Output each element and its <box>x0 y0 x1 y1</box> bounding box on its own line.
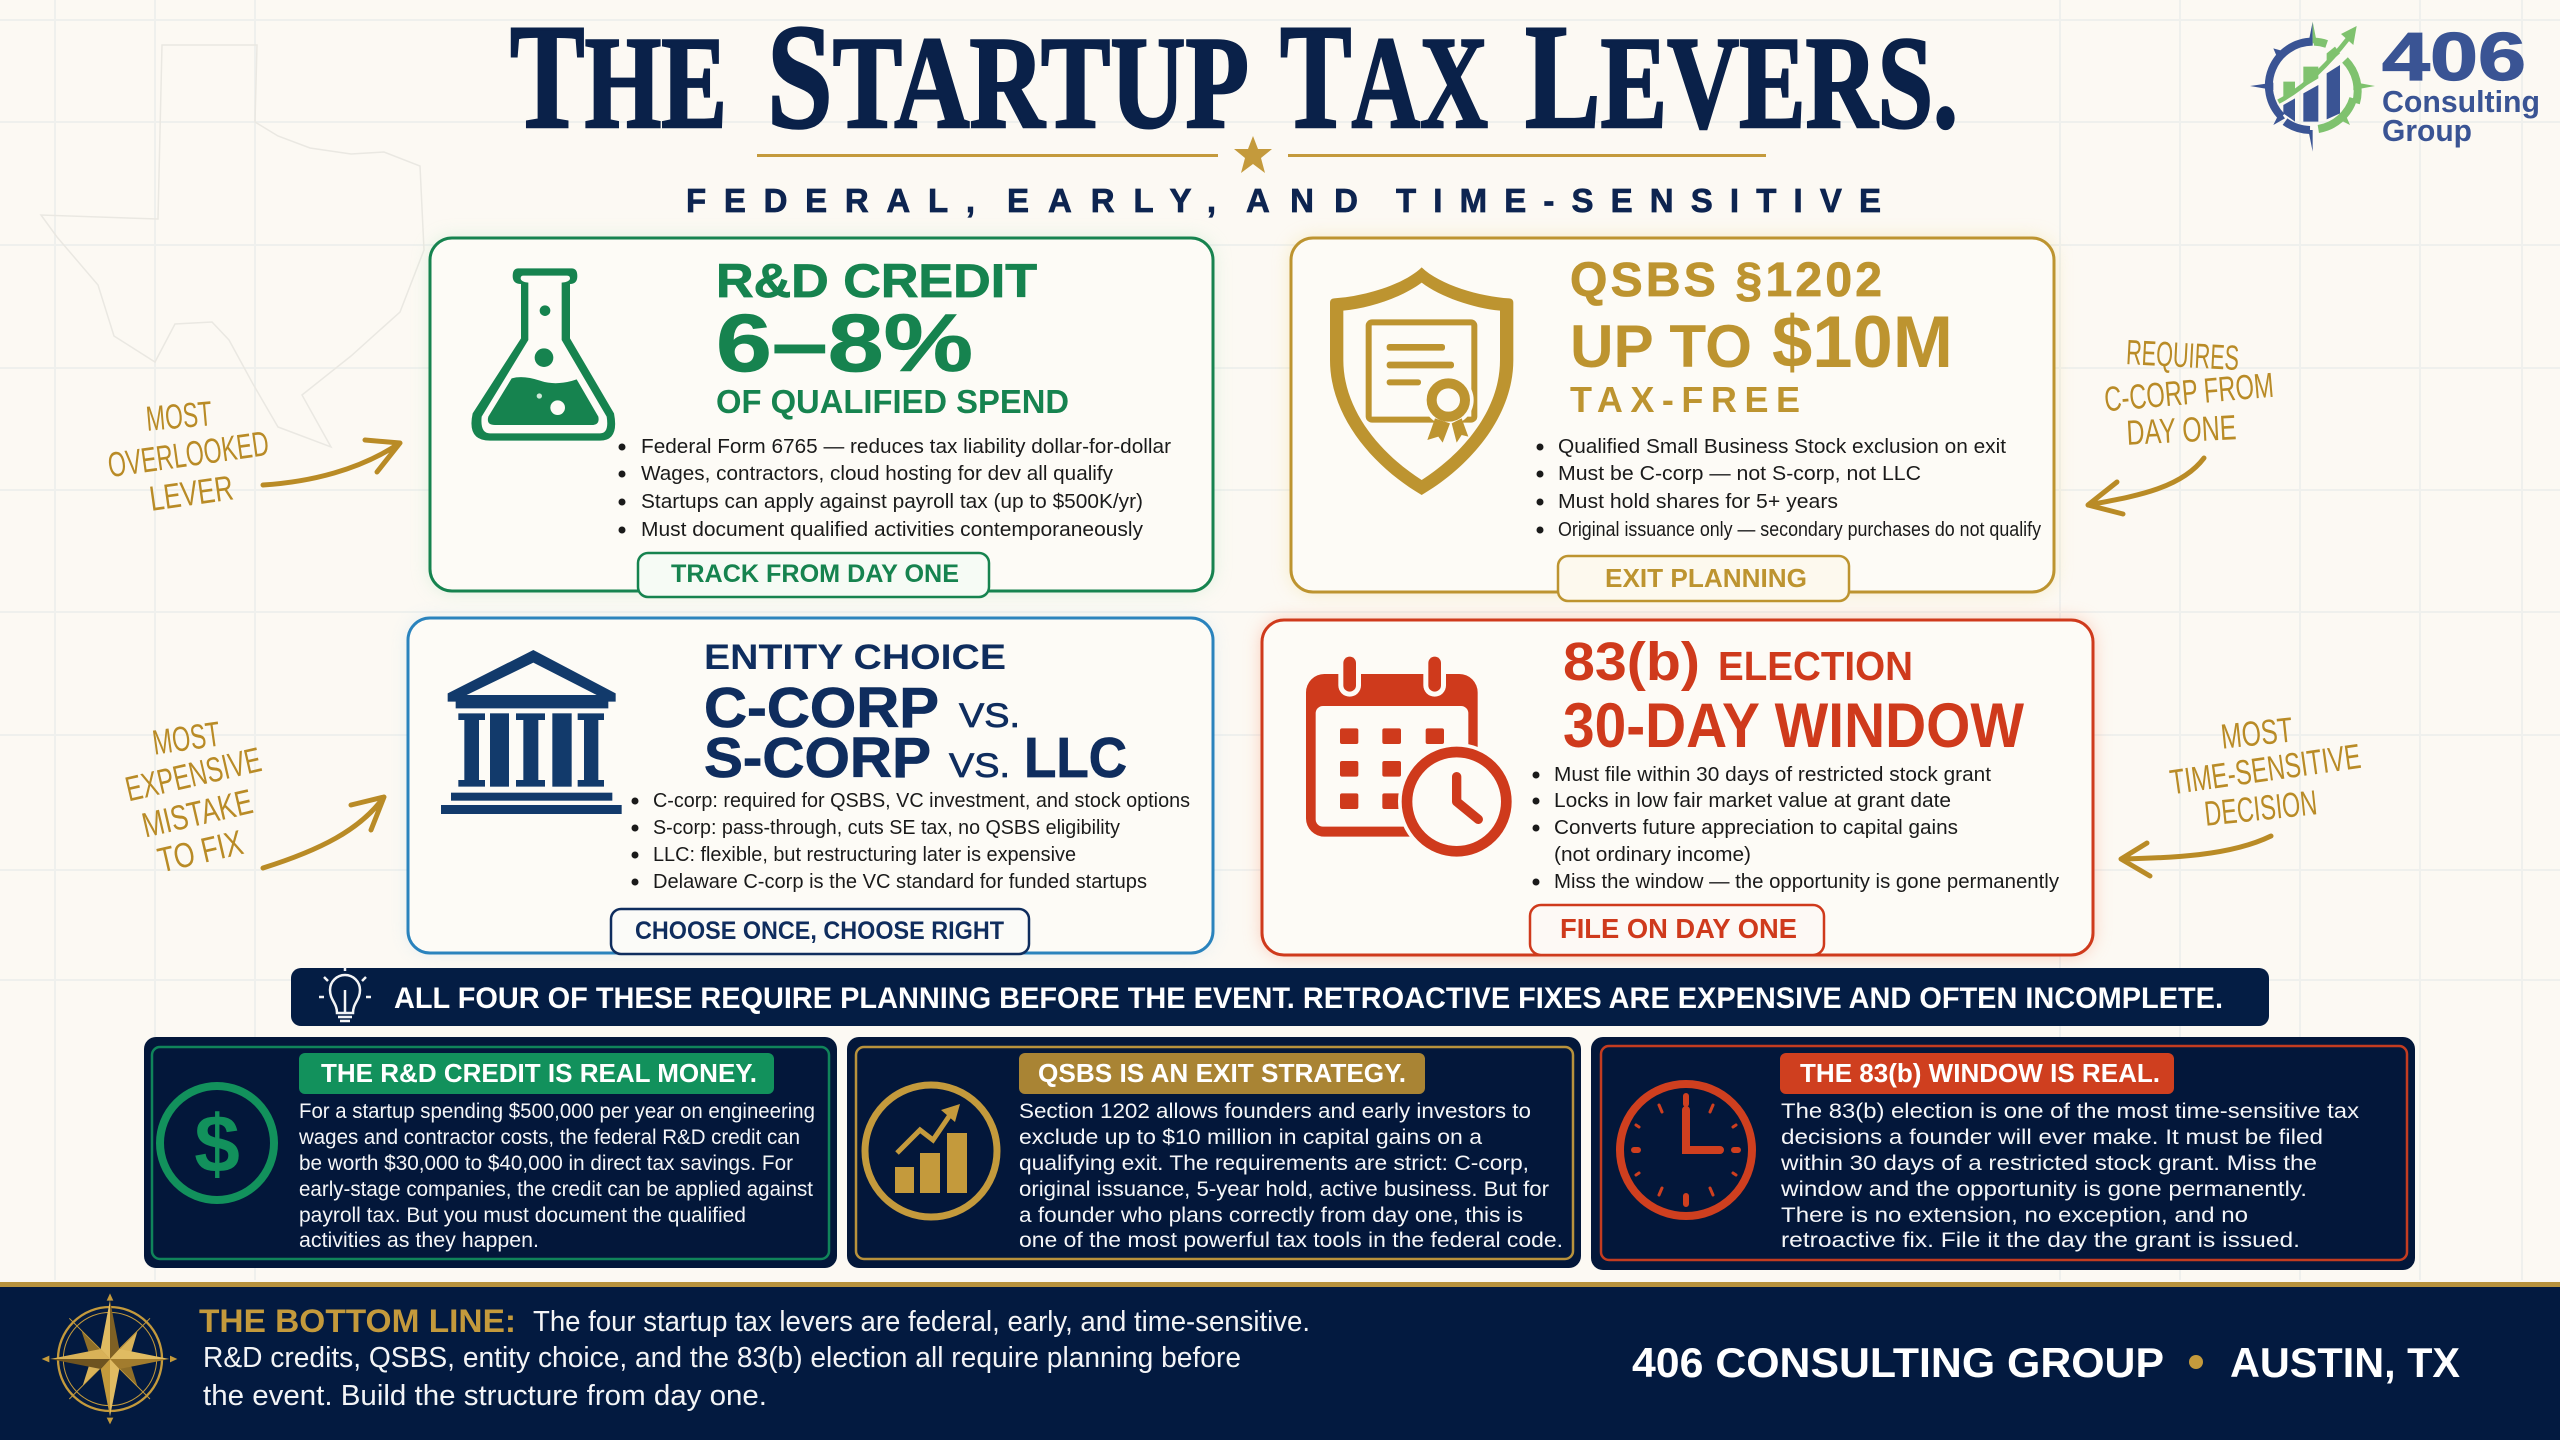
stat: up to $10M: UP TO <box>1570 313 1752 380</box>
bullet list: Must be C-corp — not S-corp, not LLC <box>1558 463 1921 485</box>
icon: compass rose <box>42 1293 177 1424</box>
heading: R&D credit: R&D CREDIT <box>716 254 1037 307</box>
body text: payroll tax. But you must document the qualified <box>299 1204 746 1227</box>
body text: early-stage companies, the credit can be applied against <box>299 1178 813 1201</box>
background: faint Texas outline <box>41 45 424 447</box>
tag: QSBS is an exit strategy: QSBS IS AN EXIT STRATEGY. <box>1038 1058 1406 1088</box>
annotation: most overlooked lever <box>105 394 400 519</box>
comparison: C-corp vs S-corp vs LLC <box>704 676 1127 790</box>
bullet list <box>1532 764 2059 893</box>
title <box>510 0 1958 160</box>
body text: For a startup spending $500,000 per year on engineering <box>299 1100 815 1123</box>
annotation: most expensive mistake to fix: EXPENSIVE <box>122 740 265 809</box>
heading: 83(b) election: 83(b) <box>1563 632 1700 692</box>
footer brand and location <box>1632 1339 2460 1386</box>
panel: 83(b) election <box>1262 620 2093 955</box>
tag: track from day one: TRACK FROM DAY ONE <box>671 560 959 588</box>
footer brand and location: AUSTIN, TX <box>2230 1339 2460 1386</box>
body text: original issuance, 5-year hold, active business. But for <box>1019 1178 1549 1201</box>
icon: growth chart <box>865 1085 997 1217</box>
subtitle: FEDERAL, <box>686 182 975 219</box>
annotation: most expensive mistake to fix: MISTAKE <box>138 782 256 845</box>
bullet list: Must document qualified activities contemporaneously <box>641 519 1143 541</box>
bullet list: Startups can apply against payroll tax (up to $500K/yr) <box>641 491 1143 513</box>
body text <box>1019 1100 1563 1252</box>
bottom line text: R&D credits, QSBS, entity choice, and the 83(b) election all require planning before <box>203 1342 1241 1374</box>
annotation: most time-sensitive decision <box>2121 710 2363 876</box>
body text: exclude up to $10 million in capital gains on a <box>1019 1126 1482 1149</box>
body text: wages and contractor costs, the federal R&D credit can <box>298 1126 800 1149</box>
bullet list: Wages, contractors, cloud hosting for dev all qualify <box>641 463 1113 485</box>
annotation: requires C-corp from day one: DAY ONE <box>2125 408 2237 453</box>
bullet list: (not ordinary income) <box>1554 844 1751 866</box>
annotation: requires C-corp from day one: C-CORP FROM <box>2103 366 2275 419</box>
comparison: C-corp vs S-corp vs LLC: C-CORP <box>704 676 939 740</box>
bullet list: Must file within 30 days of restricted stock grant <box>1554 764 1991 786</box>
footer band <box>0 1282 2560 1440</box>
title divider with star <box>757 136 1766 173</box>
body text <box>298 1100 815 1252</box>
body text: decisions a founder will ever make. It must be filed <box>1781 1126 2323 1149</box>
body text: a founder who plans correctly from day one, this is <box>1019 1204 1523 1227</box>
bottom line text: The four startup tax levers are federal, early, and time-sensitive. <box>533 1306 1310 1338</box>
bullet list: Delaware C-corp is the VC standard for funded startups <box>653 871 1147 893</box>
tag: choose once, choose right <box>611 909 1029 954</box>
bullet list: Original issuance only — secondary purchases do not qualify <box>1558 519 2041 541</box>
comparison: C-corp vs S-corp vs LLC: VS. <box>949 747 1010 785</box>
body text: qualifying exit. The requirements are strict: C-corp, <box>1019 1152 1529 1175</box>
annotation: most time-sensitive decision: TIME-SENSITIVE <box>2168 737 2363 802</box>
annotation: most expensive mistake to fix: MOST <box>150 715 223 763</box>
heading: 83(b) election <box>1563 632 1913 692</box>
tag: 83(b) window is real <box>1780 1053 2174 1094</box>
icon: classical building <box>441 650 622 814</box>
bullet list: Qualified Small Business Stock exclusion on exit <box>1558 436 2006 458</box>
bottom line text <box>199 1303 1310 1412</box>
heading: QSBS §1202: QSBS §1202 <box>1570 254 1882 307</box>
annotation: requires C-corp from day one: REQUIRES <box>2125 333 2240 378</box>
stat: 6–8%: 6–8% <box>716 298 973 389</box>
footer brand and location: 406 CONSULTING GROUP <box>1632 1339 2164 1386</box>
icon: shield with certificate <box>1330 267 1513 495</box>
annotation: requires C-corp from day one <box>2088 333 2275 514</box>
tag: file on day one <box>1530 905 1824 955</box>
body text: activities as they happen. <box>299 1229 539 1252</box>
body text: be worth $30,000 to $40,000 in direct tax savings. For <box>299 1152 793 1175</box>
icon: clock <box>1620 1084 1752 1216</box>
icon: flask <box>471 268 615 441</box>
annotation: most expensive mistake to fix <box>122 715 384 880</box>
tag: QSBS is an exit strategy <box>1019 1053 1425 1094</box>
logo: 406 Consulting Group: Group <box>2382 113 2472 148</box>
bottom line text: the event. Build the structure from day one. <box>203 1380 767 1412</box>
bullet list: Converts future appreciation to capital gains <box>1554 817 1958 839</box>
annotation: most overlooked lever: OVERLOOKED <box>105 424 271 485</box>
body text: within 30 days of a restricted stock grant. Miss the <box>1780 1152 2317 1175</box>
bullet list <box>1536 436 2041 541</box>
comparison: C-corp vs S-corp vs LLC: S-CORP <box>704 726 931 790</box>
heading: entity choice: ENTITY CHOICE <box>704 638 1006 677</box>
subheading: tax-free: TAX-FREE <box>1570 379 1800 420</box>
body text: There is no extension, no exception, and no <box>1781 1204 2248 1227</box>
comparison: C-corp vs S-corp vs LLC: VS. <box>959 697 1020 735</box>
banner: planning callout <box>291 967 2269 1026</box>
annotation: most time-sensitive decision: DECISION <box>2203 783 2319 834</box>
tag: exit planning: EXIT PLANNING <box>1605 563 1807 593</box>
tag: 83(b) window is real: THE 83(b) WINDOW IS REAL. <box>1800 1058 2160 1088</box>
body text <box>1780 1100 2360 1252</box>
tag: exit planning <box>1558 556 1849 601</box>
banner: planning callout: ALL FOUR OF THESE REQUIRE PLANNING BEFORE THE EVENT. RETROACTIVE FIXES ARE EXPENSIVE AND OFTEN INCOMPLETE. <box>394 982 2223 1015</box>
subtitle <box>686 182 1881 219</box>
logo mark: compass and growth chart <box>2250 22 2375 152</box>
icon: dollar coin <box>160 1086 274 1200</box>
icon: dollar coin: $ <box>194 1099 240 1190</box>
icon: calendar with clock <box>1306 652 1515 860</box>
annotation: most overlooked lever: LEVER <box>147 468 236 519</box>
body text: The 83(b) election is one of the most time-sensitive tax <box>1781 1100 2360 1123</box>
bullet list: LLC: flexible, but restructuring later is expensive <box>653 844 1076 866</box>
annotation: most time-sensitive decision: MOST <box>2219 710 2295 757</box>
annotation: most expensive mistake to fix: TO FIX <box>154 823 247 880</box>
panel: entity choice <box>408 618 1213 954</box>
bullet list: Must hold shares for 5+ years <box>1558 491 1838 513</box>
bullet list: S-corp: pass-through, cuts SE tax, no QSBS eligibility <box>653 817 1120 839</box>
body text: Section 1202 allows founders and early investors to <box>1019 1100 1531 1123</box>
stat: 30-day window: 30-DAY WINDOW <box>1563 691 2024 761</box>
tag: choose once, choose right: CHOOSE ONCE, CHOOSE RIGHT <box>635 917 1004 945</box>
subtitle: EARLY, <box>1007 182 1216 219</box>
body text: window and the opportunity is gone permanently. <box>1780 1178 2307 1201</box>
stat: up to $10M <box>1570 302 1953 383</box>
panel: QSBS 1202 <box>1291 238 2054 601</box>
panel: R&D credit detail <box>144 1037 837 1268</box>
bullet list: Federal Form 6765 — reduces tax liability dollar-for-dollar <box>641 436 1171 458</box>
bullet list: Miss the window — the opportunity is gone permanently <box>1554 871 2059 893</box>
panel: 83(b) detail <box>1591 1037 2415 1270</box>
heading: 83(b) election: ELECTION <box>1718 643 1913 689</box>
tag: R&D credit is real money: THE R&D CREDIT IS REAL MONEY. <box>321 1058 757 1088</box>
icon: lightbulb <box>319 967 371 1021</box>
bullet list: C-corp: required for QSBS, VC investment, and stock options <box>653 790 1190 812</box>
subtitle: TIME-SENSITIVE <box>1396 182 1881 219</box>
annotation: most overlooked lever: MOST <box>144 394 214 439</box>
tag: file on day one: FILE ON DAY ONE <box>1560 913 1797 944</box>
subheading: OF QUALIFIED SPEND <box>716 383 1069 420</box>
bullet list: Locks in low fair market value at grant date <box>1554 790 1951 812</box>
body text: one of the most powerful tax tools in the federal code. <box>1019 1229 1563 1252</box>
bullet list <box>618 436 1171 541</box>
logo: 406 Consulting Group: 406 <box>2382 19 2526 95</box>
bottom line text: THE BOTTOM LINE: <box>199 1303 516 1339</box>
logo: 406 Consulting Group <box>2250 19 2540 152</box>
comparison: C-corp vs S-corp vs LLC: LLC <box>1024 726 1127 790</box>
panel: R&D credit <box>430 238 1213 597</box>
body text: retroactive fix. File it the day the grant is issued. <box>1781 1229 2300 1252</box>
tag: track from day one <box>638 553 989 597</box>
logo: 406 Consulting Group: Consulting <box>2382 84 2540 119</box>
bullet list <box>632 790 1190 893</box>
panel: QSBS detail <box>847 1037 1581 1268</box>
stat: up to $10M: $10M <box>1772 302 1953 383</box>
subtitle: AND <box>1246 182 1358 219</box>
tag: R&D credit is real money <box>299 1053 774 1094</box>
